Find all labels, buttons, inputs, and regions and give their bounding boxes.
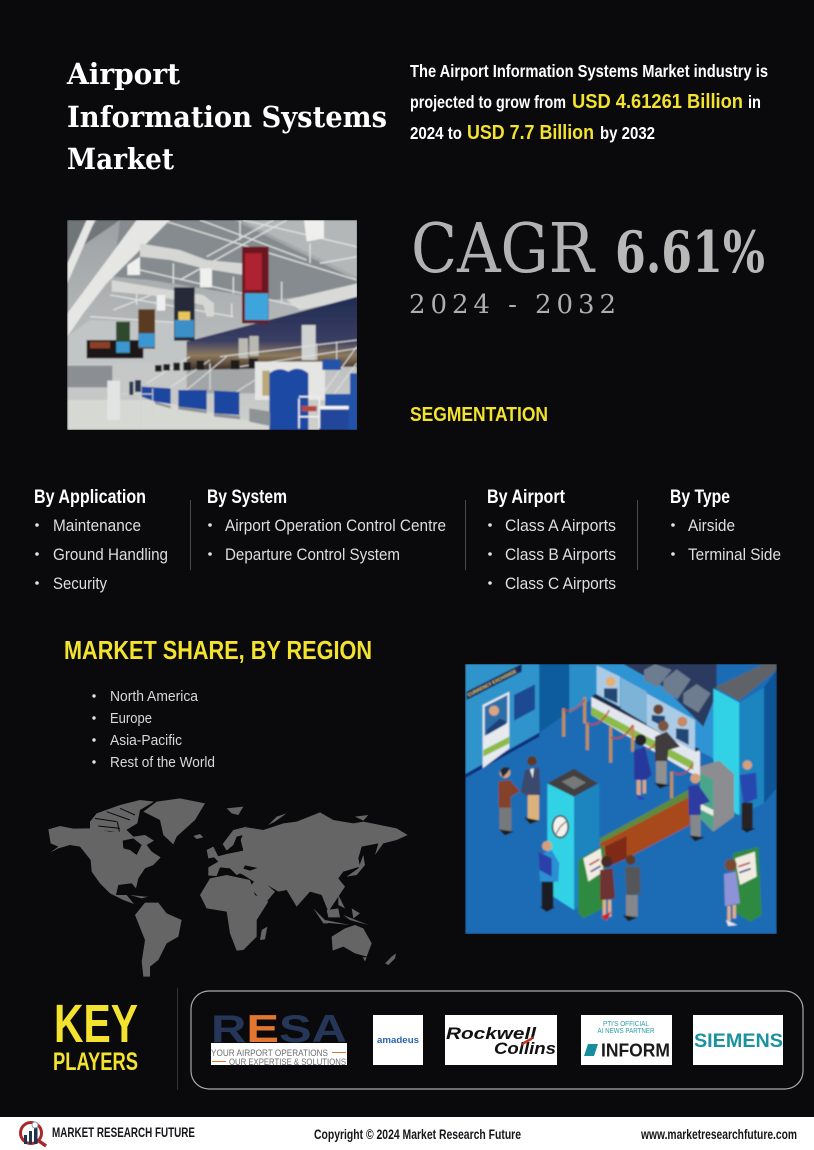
segment: by airport: By Airport — [487, 487, 566, 508]
key players heading: KEY — [54, 994, 138, 1054]
Eurasia landmass — [208, 812, 408, 912]
logo: RESA — [211, 1008, 347, 1068]
segment: by application: Ground Handling — [53, 546, 168, 564]
airport terminal photo — [67, 220, 357, 430]
segment: by system: Departure Control System — [225, 546, 400, 564]
region list: Europe — [110, 711, 152, 727]
logo: RESA: OUR EXPERTISE & SOLUTIONS — [229, 1057, 346, 1068]
left wall — [465, 664, 539, 776]
logo: Amadeus: amadeus — [377, 1035, 419, 1046]
segment: by system: Airport Operation Control Centre — [225, 517, 446, 535]
segment: by application — [34, 487, 168, 593]
counter staff — [604, 677, 689, 745]
wall — [67, 320, 187, 367]
woman at left kiosk — [600, 856, 615, 921]
right pillar — [713, 688, 739, 815]
logo: Rockwell Collins: Collins — [494, 1039, 556, 1058]
kiosk right — [733, 847, 762, 922]
clock — [552, 815, 569, 838]
title — [66, 57, 387, 176]
segment: by type: Airside — [688, 517, 735, 535]
logo: RESA: YOUR AIRPORT OPERATIONS — [211, 1048, 328, 1059]
segment: by type — [670, 487, 781, 564]
market forecast text: in — [748, 92, 761, 112]
logo: Siemens: SIEMENS — [694, 1031, 783, 1052]
logo: INFORM: PTI'S OFFICIAL — [603, 1019, 649, 1028]
handshaking pair — [498, 756, 541, 835]
logo: Amadeus — [373, 1015, 423, 1065]
title: Market — [67, 142, 175, 176]
woman at counter — [634, 734, 652, 800]
airport hall illustration: CURRENCY EXCHANGE — [467, 669, 517, 698]
market forecast text: projected to grow from — [410, 92, 566, 112]
market forecast text: USD 4.61261 Billion — [572, 91, 743, 113]
CAGR heading: 6.61% — [615, 219, 765, 286]
segment: by system — [207, 487, 446, 564]
segment: by type: By Type — [670, 487, 730, 508]
CAGR heading — [409, 210, 765, 320]
segment: by system: By System — [207, 487, 287, 508]
truss lines — [90, 220, 357, 323]
world map — [48, 798, 408, 977]
hanging banners — [242, 247, 269, 323]
logo: RESA: RESA — [211, 1008, 347, 1051]
region list: Rest of the World — [110, 755, 215, 771]
logo: Siemens — [693, 1015, 783, 1065]
region list: North America — [110, 689, 199, 705]
footer bar — [0, 1117, 814, 1150]
segment: by type: Terminal Side — [688, 546, 781, 564]
key players heading — [53, 994, 138, 1076]
logo: Rockwell Collins: Rockwell — [446, 1024, 538, 1043]
logo: INFORM: AI NEWS PARTNER — [598, 1028, 654, 1035]
man at machine — [688, 773, 710, 841]
segment: by airport: Class B Airports — [505, 546, 616, 564]
counter wall — [595, 664, 717, 760]
logo: Rockwell Collins — [445, 1015, 557, 1065]
kiosk column — [107, 381, 120, 420]
brown barrier — [600, 797, 690, 867]
market forecast text: USD 7.7 Billion — [467, 122, 594, 144]
market forecast text: by 2032 — [600, 123, 655, 143]
market forecast text — [410, 61, 768, 144]
segmentation heading: SEGMENTATION — [410, 404, 548, 426]
segment: by application: By Application — [34, 487, 146, 508]
woman at right kiosk — [724, 859, 740, 926]
key players panel — [191, 991, 803, 1089]
segment: by application: Security — [53, 575, 108, 593]
air ducts — [67, 220, 170, 337]
footer copyright: Copyright © 2024 Market Research Future — [314, 1127, 521, 1142]
mural — [187, 297, 357, 370]
CAGR heading: 2024 - 2032 — [409, 290, 616, 320]
footer logo icon — [20, 1122, 46, 1146]
ceiling panels — [113, 220, 357, 300]
poster — [483, 692, 509, 768]
logo: INFORM: INFORM — [601, 1040, 670, 1060]
center pillar — [547, 783, 574, 910]
region list: Asia-Pacific — [110, 733, 182, 749]
lower back wall — [187, 367, 257, 393]
market share heading: MARKET SHARE, BY REGION — [64, 635, 372, 665]
footer brand: MARKET RESEARCH FUTURE — [52, 1125, 195, 1140]
title: Airport — [66, 57, 181, 91]
segment: by airport — [487, 487, 616, 593]
exchange machine — [700, 761, 734, 832]
region list — [92, 689, 215, 771]
right staff — [739, 760, 757, 833]
CAGR heading: CAGR — [411, 210, 596, 289]
attendant left — [538, 841, 559, 912]
exchange sign — [467, 664, 522, 700]
man at counter — [654, 721, 680, 788]
stairs and rails — [147, 347, 357, 395]
logo: INFORM — [581, 1015, 672, 1065]
printers on back counter — [623, 664, 717, 727]
segment: by airport: Class C Airports — [505, 575, 616, 593]
title: Information Systems — [67, 100, 387, 134]
segment: by application: Maintenance — [53, 517, 141, 535]
check-in counters — [142, 387, 239, 415]
segment: by airport: Class A Airports — [505, 517, 616, 535]
blue booth — [255, 362, 325, 400]
floor — [67, 400, 293, 430]
airport hall illustration — [465, 664, 777, 934]
kiosk left — [578, 845, 607, 918]
man in suit — [623, 855, 641, 921]
market forecast text: 2024 to — [410, 123, 462, 143]
key players heading: PLAYERS — [53, 1048, 138, 1076]
queue rope — [564, 697, 693, 798]
